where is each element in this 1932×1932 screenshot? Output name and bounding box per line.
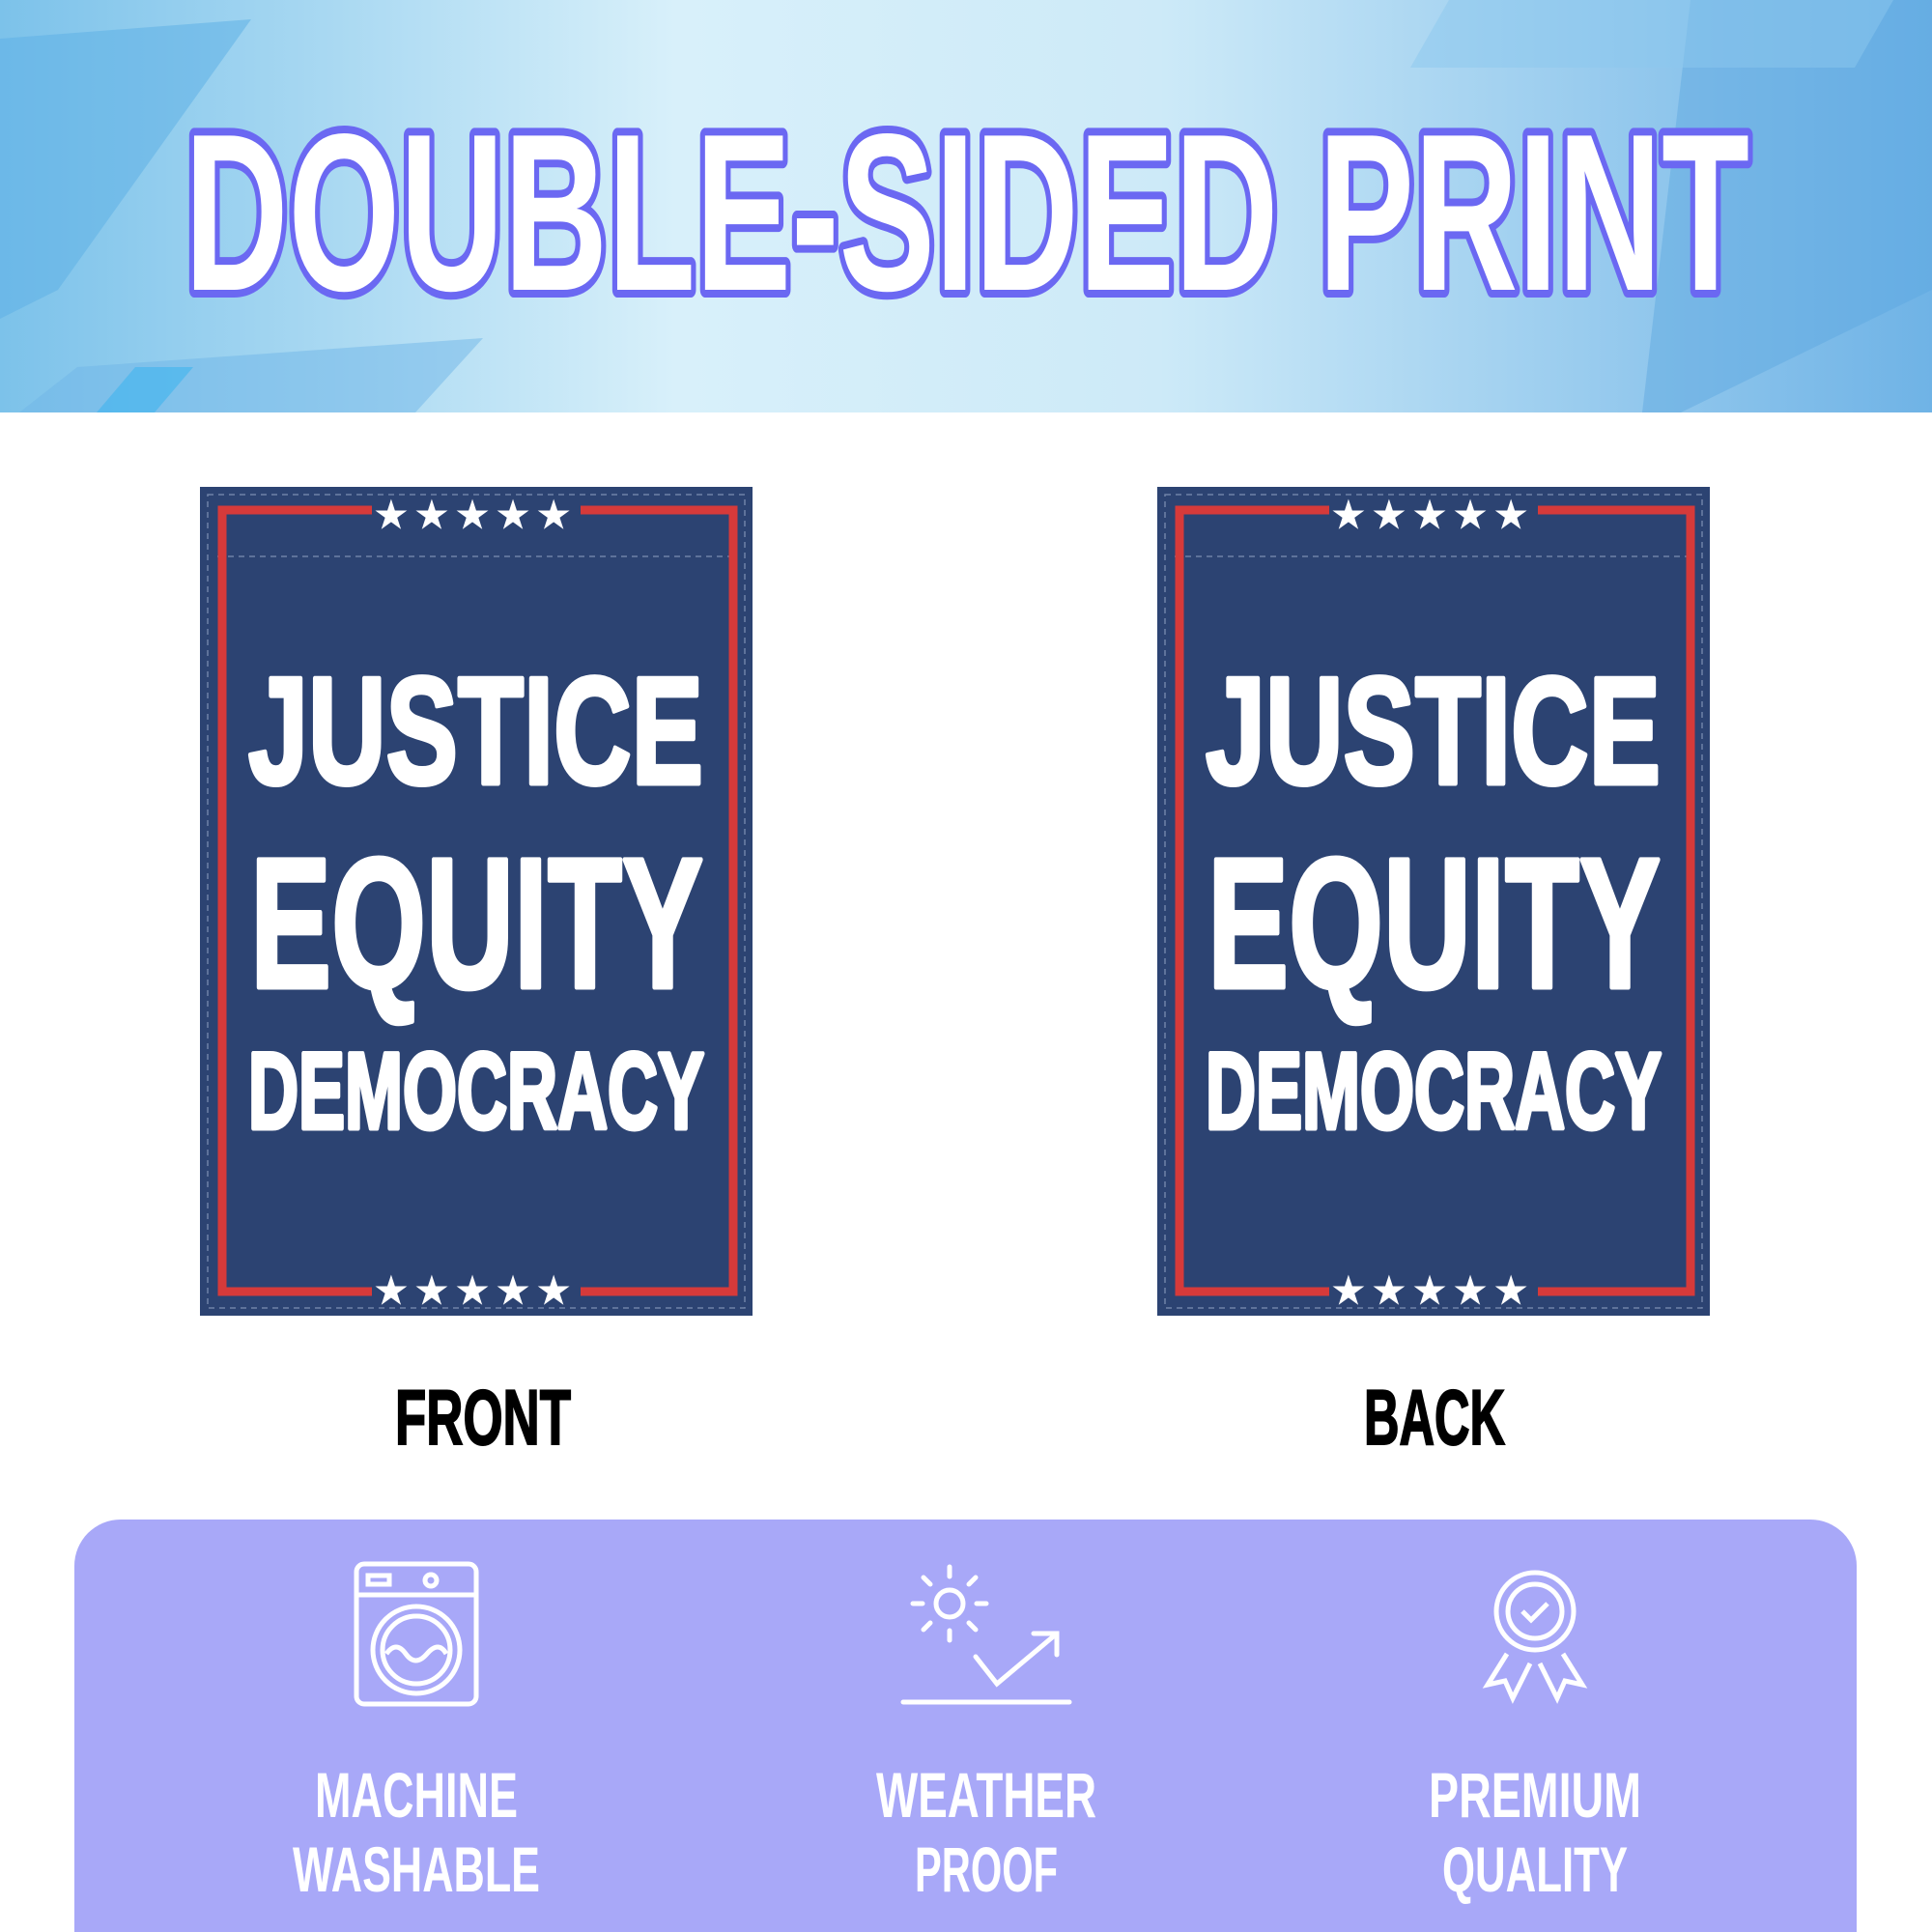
- flag: back: JUSTICE: [1206, 646, 1661, 816]
- flag: front: [200, 487, 753, 1316]
- text: machine washable: [293, 1759, 540, 1905]
- flag: front: JUSTICE: [248, 646, 703, 816]
- flag: back: DEMOCRACY: [1206, 1031, 1662, 1151]
- label: front: FRONT: [395, 1375, 571, 1462]
- flag: front: DEMOCRACY: [248, 1031, 704, 1151]
- flag: front: EQUITY: [250, 819, 703, 1027]
- text: weather proof: WEATHER: [876, 1759, 1096, 1831]
- icon: weather: [903, 1567, 1069, 1702]
- text: premium quality: PREMIUM: [1429, 1759, 1641, 1831]
- flag: front: ★★★★★: [375, 496, 578, 536]
- text: machine washable: WASHABLE: [293, 1833, 540, 1905]
- flag: back: [1157, 487, 1710, 1316]
- text: premium quality: [1429, 1759, 1641, 1905]
- text: weather proof: [876, 1759, 1096, 1905]
- flag: back: EQUITY: [1208, 819, 1661, 1027]
- header banner: [0, 0, 1932, 412]
- icon: premium badge: [1488, 1573, 1582, 1698]
- features panel: [74, 1520, 1857, 1932]
- icon: washing machine: [356, 1564, 476, 1704]
- text: premium quality: QUALITY: [1442, 1833, 1628, 1905]
- flag: back: ★★★★★: [1332, 1271, 1535, 1312]
- text: weather proof: PROOF: [915, 1833, 1058, 1905]
- flag: back: ★★★★★: [1332, 496, 1535, 536]
- label: back: BACK: [1364, 1375, 1505, 1462]
- text: machine washable: MACHINE: [315, 1759, 518, 1831]
- flag: front: ★★★★★: [375, 1271, 578, 1312]
